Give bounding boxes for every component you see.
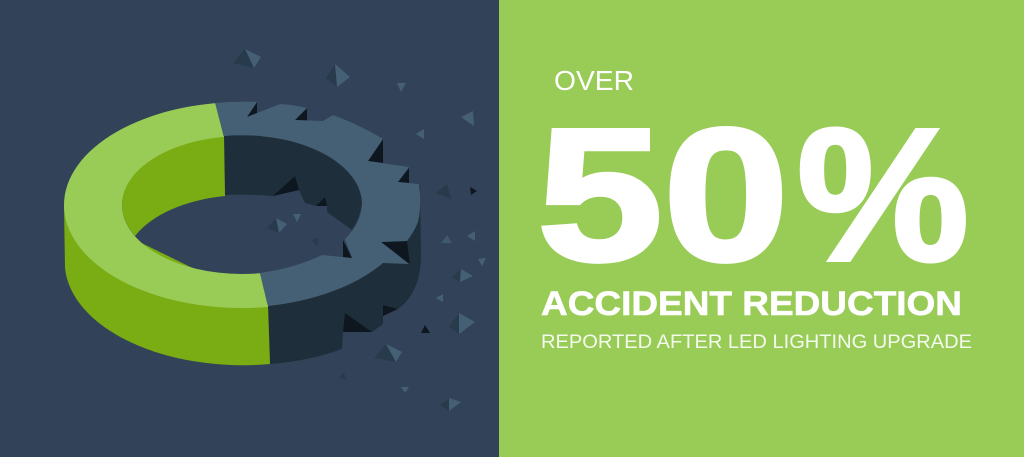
- ring: green top face: [64, 103, 268, 308]
- text: 50% headline: 50: [537, 90, 789, 301]
- chart: shattering 3D ring: [64, 102, 421, 365]
- text: 50% headline: [537, 90, 969, 301]
- ring: blue inner wall: [224, 135, 362, 230]
- ring: green inner wall: [122, 136, 225, 236]
- text: accident reduction: ACCIDENT REDUCTION: [541, 285, 962, 323]
- ring: green outer side wall: [64, 205, 270, 365]
- debris: flying fragments: [233, 49, 486, 411]
- text: over: OVER: [554, 65, 634, 96]
- ring: black notches in inner wall: [247, 102, 410, 264]
- panel: green background: [499, 0, 1024, 457]
- ring: black notches in side wall: [343, 305, 398, 332]
- text: 50% headline: %: [797, 90, 969, 301]
- ring: blue top face with broken teeth: [215, 102, 420, 306]
- ring: blue outer side wall: [268, 184, 421, 364]
- text: reported after LED lighting upgrade: REPORTED AFTER LED LIGHTING UPGRADE: [541, 332, 972, 353]
- panel: dark navy background: [0, 0, 499, 457]
